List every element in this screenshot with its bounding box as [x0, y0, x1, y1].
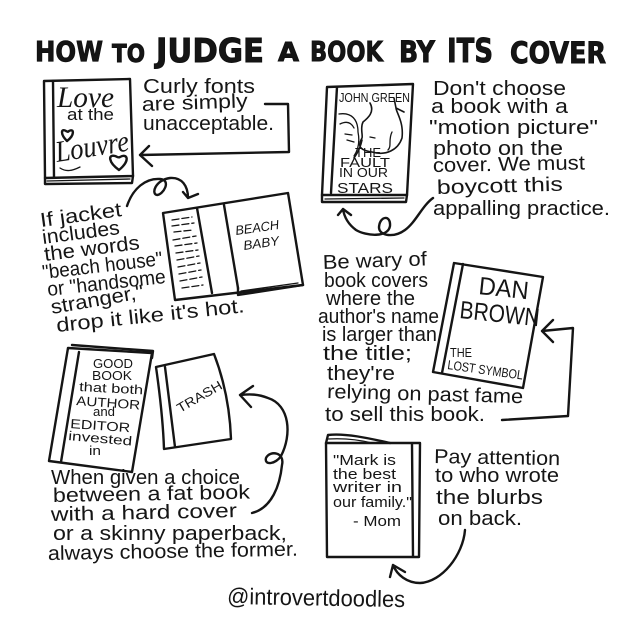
text: author name advice: relying on past fame: [327, 381, 523, 408]
text: author name advice: they're: [327, 363, 395, 385]
icon: book back with blurb: [326, 435, 420, 557]
icon: book with curly title: Louvre: [52, 125, 131, 169]
icon: Dan Brown book: THE: [450, 345, 472, 360]
text: curly fonts: unacceptable.: [143, 113, 274, 135]
text: jacket advice: "beach house": [41, 248, 164, 284]
arrow: loop to open book: [127, 178, 198, 206]
arrow: loop to movie book: [338, 198, 433, 235]
text: blurbs advice: [434, 446, 560, 530]
text: motion picture advice: Don't choose: [433, 78, 566, 100]
arrow: text to book: [140, 104, 289, 166]
text: fat book advice: When given a choice: [51, 467, 240, 489]
text: fat book advice: or a skinny paperback,: [53, 523, 287, 545]
icon: book with movie photo: FAULT: [340, 155, 390, 170]
icon: fat hardcover book: EDITOR: [70, 416, 131, 435]
icon: open book: BABY: [242, 233, 281, 253]
text: motion picture advice: appalling practice.: [433, 198, 610, 220]
icon: skinny trash paperback: TRASH: [174, 378, 225, 416]
text: blurbs advice: on back.: [438, 508, 522, 530]
text: curly fonts: are simply: [141, 90, 248, 116]
text: author name advice: [318, 248, 523, 426]
text: motion picture advice: cover. We must: [433, 152, 586, 177]
text: motion picture advice: [429, 78, 610, 220]
text: author name advice: to sell this book.: [325, 404, 485, 426]
panel: fat book vs skinny paperback: [48, 345, 298, 565]
text: jacket advice: drop it like it's hot.: [55, 295, 245, 337]
arrow: loop to fat book: [240, 386, 288, 513]
icon: book with curly title: [44, 79, 133, 184]
panel: author name larger than title: [318, 248, 573, 426]
text: author name advice: where the: [325, 288, 415, 310]
arrow: text to Dan Brown book: [502, 320, 573, 420]
credit handle: @introvertdoodles: [227, 583, 405, 612]
icon: fat hardcover book: that both: [79, 379, 144, 397]
text: blurbs advice: Pay attention: [434, 446, 560, 470]
icon: open book: BEACH: [234, 217, 281, 238]
text: fat book advice: with a hard cover: [49, 500, 237, 526]
title: ITS: [447, 31, 493, 70]
title: JUDGE: [154, 31, 264, 70]
text: jacket advice: [39, 199, 245, 337]
icon: open book: [163, 193, 303, 300]
icon: fat hardcover book: in: [89, 443, 101, 458]
icon: fat hardcover book: and: [93, 404, 115, 419]
title: A: [278, 38, 299, 68]
text: jacket advice: the words: [43, 232, 141, 266]
text: blurbs advice: the blurbs: [436, 487, 543, 509]
icon: book back with blurb: the best: [333, 466, 397, 483]
icon: fat hardcover book: GOOD: [93, 356, 133, 371]
icon: Dan Brown book: [433, 263, 543, 388]
text: blurbs advice: to who wrote: [435, 465, 559, 487]
icon: fat hardcover book: invested: [68, 428, 133, 449]
text: fat book advice: between a fat book: [53, 482, 251, 507]
text: author name advice: Be wary of: [322, 248, 428, 274]
text: author name advice: is larger than: [322, 324, 437, 346]
title: TO: [112, 39, 145, 68]
text: jacket advice: or "handsome: [46, 266, 167, 301]
icon: book back with blurb: our family.": [333, 494, 412, 511]
icon: book with movie photo: JOHN GREEN: [339, 90, 410, 105]
icon: book with curly title: Love: [56, 81, 114, 114]
text: jacket advice: If jacket: [39, 199, 123, 232]
panel: blurbs: [326, 435, 560, 583]
title: BY: [399, 35, 436, 69]
title: [35, 31, 606, 70]
icon: Dan Brown book: BROWN: [458, 296, 541, 332]
text: motion picture advice: a book with a: [431, 96, 569, 118]
icon: Dan Brown book: DAN: [477, 272, 530, 305]
icon: fat hardcover book: BOOK: [92, 368, 132, 383]
icon: fat hardcover book: [49, 345, 153, 472]
text: jacket advice: stranger,": [49, 281, 145, 319]
text: jacket advice: includes: [41, 217, 121, 249]
icon: book back with blurb: - Mom: [353, 513, 401, 530]
icon: book back with blurb: "Mark is: [333, 452, 396, 469]
icon: Dan Brown book: LOST SYMBOL: [447, 357, 524, 383]
arrow: text to book back: [390, 530, 465, 583]
icon: book back with blurb: writer in: [332, 479, 402, 496]
icon: book with movie photo: IN OUR: [339, 165, 388, 180]
panel: beach baby: [39, 178, 303, 337]
text: motion picture advice: "motion picture": [429, 117, 598, 139]
icon: book with movie photo: THE: [355, 145, 381, 160]
text: fat book advice: always choose the former.: [48, 539, 298, 565]
icon: fat hardcover book: AUTHOR: [76, 393, 141, 412]
icon: skinny trash paperback: [156, 354, 231, 449]
text: curly fonts: [141, 76, 274, 135]
text: motion picture advice: photo on the: [433, 138, 563, 160]
panel: motion picture cover: [322, 78, 610, 235]
title: COVER: [510, 36, 606, 70]
icon: book with movie photo: [322, 84, 413, 202]
text: motion picture advice: boycott this: [437, 174, 563, 199]
text: author name advice: author's name: [318, 306, 439, 328]
icon: book with movie photo: STARS: [337, 180, 393, 197]
text: curly fonts: Curly fonts: [143, 76, 255, 98]
panel: curly fonts: [44, 76, 289, 184]
title: BOOK: [310, 35, 384, 68]
icon: book with curly title: at the: [67, 105, 114, 124]
text: author name advice: the title;: [323, 343, 412, 365]
text: author name advice: book covers: [324, 270, 428, 292]
text: fat book advice: [48, 467, 298, 565]
title: HOW: [35, 35, 103, 68]
